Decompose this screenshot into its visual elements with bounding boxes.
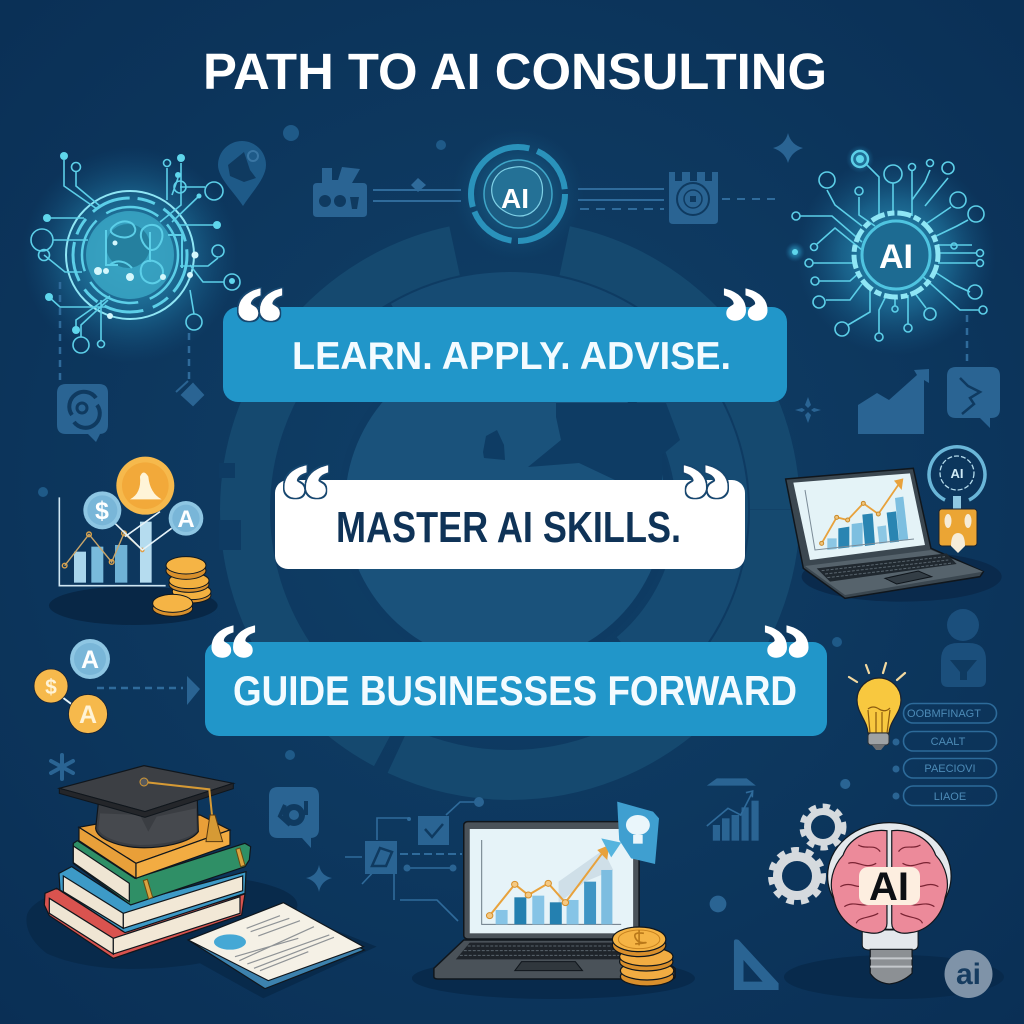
illustration: laptop with growth chart and coins	[412, 802, 695, 999]
dashed link to right circuit	[722, 198, 778, 200]
icon: sparkle	[795, 397, 821, 423]
icon: map pin	[218, 141, 266, 206]
chart coin labels	[95, 497, 195, 533]
connector lines to chip	[578, 189, 664, 209]
pill: CAALT	[931, 736, 966, 748]
shadow under brain bulb	[784, 955, 1004, 999]
coin labels: A	[79, 701, 97, 729]
closing quote mark: “	[682, 446, 731, 554]
quote card: Learn Apply Advise	[223, 269, 787, 402]
icon: star	[306, 865, 332, 892]
icon: light bulb	[849, 663, 905, 750]
slogan text: GUIDE BUSINESSES FORWARD	[233, 667, 797, 714]
icon: chat bubble with figure	[947, 367, 1000, 428]
icon: chat bubble with gear	[269, 787, 319, 848]
icon: coin network	[34, 639, 110, 734]
pill: PAECIOVI	[924, 763, 976, 775]
icon: gears	[772, 807, 843, 902]
connector lines to AI badge	[373, 178, 461, 201]
central concentric rings	[219, 234, 786, 786]
dashed connectors from globe	[60, 282, 189, 384]
closing quote mark: “	[722, 269, 771, 377]
illustration: laptop with rising chart	[786, 468, 1002, 602]
illustration: bar chart with coins	[49, 457, 218, 625]
icon: chip	[669, 172, 718, 224]
opening quote mark: “	[235, 269, 284, 377]
opening quote mark: “	[208, 606, 257, 714]
dashed arrow to guide card	[97, 676, 200, 705]
icon: brain light bulb	[828, 823, 951, 984]
icon: chat bubble with swirl	[57, 384, 108, 442]
AI label: AI	[501, 183, 529, 214]
pill: LIAOE	[934, 791, 966, 803]
dim diagram: box and connectors	[345, 797, 484, 921]
icon: diamond	[176, 381, 203, 405]
quote card: Guide Businesses Forward	[205, 606, 827, 736]
label pills	[892, 704, 996, 806]
icon: star	[773, 133, 803, 163]
slogan text: MASTER AI SKILLS.	[336, 503, 681, 552]
pill: OOBMFINAGT	[907, 708, 981, 720]
icon: AI brain badge	[452, 128, 584, 260]
decorative dots	[38, 125, 850, 789]
coin labels	[45, 646, 99, 729]
coin labels: A	[81, 646, 99, 674]
badge: ai: ai	[956, 958, 981, 991]
icon: dim person	[941, 609, 986, 687]
chart coin labels: $	[95, 497, 109, 525]
coin labels: $	[45, 676, 57, 699]
icon: asterisk	[51, 755, 73, 779]
icon: glowing circuit globe	[22, 147, 240, 363]
AI label: AI	[950, 466, 964, 481]
closing quote mark: “	[763, 606, 812, 714]
slogan text: LEARN. APPLY. ADVISE.	[292, 335, 731, 378]
icon: AI circuit chip	[785, 145, 996, 355]
quote card: Master AI Skills	[275, 446, 745, 569]
icon: dim rising chart arrow	[858, 369, 929, 434]
AI label: AI	[869, 865, 909, 909]
badge: ai	[944, 950, 992, 998]
icon: AI head plug	[929, 447, 985, 553]
opening quote mark: “	[281, 446, 330, 554]
icon: dim bar chart	[707, 778, 850, 990]
illustration: graduation cap on books with certificate	[26, 766, 377, 998]
dashed connector to bubble	[966, 315, 968, 368]
AI label: AI	[879, 238, 913, 276]
chart coin labels: A	[177, 506, 195, 533]
title: PATH TO AI CONSULTING	[203, 43, 827, 100]
icon: toolbox	[313, 167, 367, 217]
